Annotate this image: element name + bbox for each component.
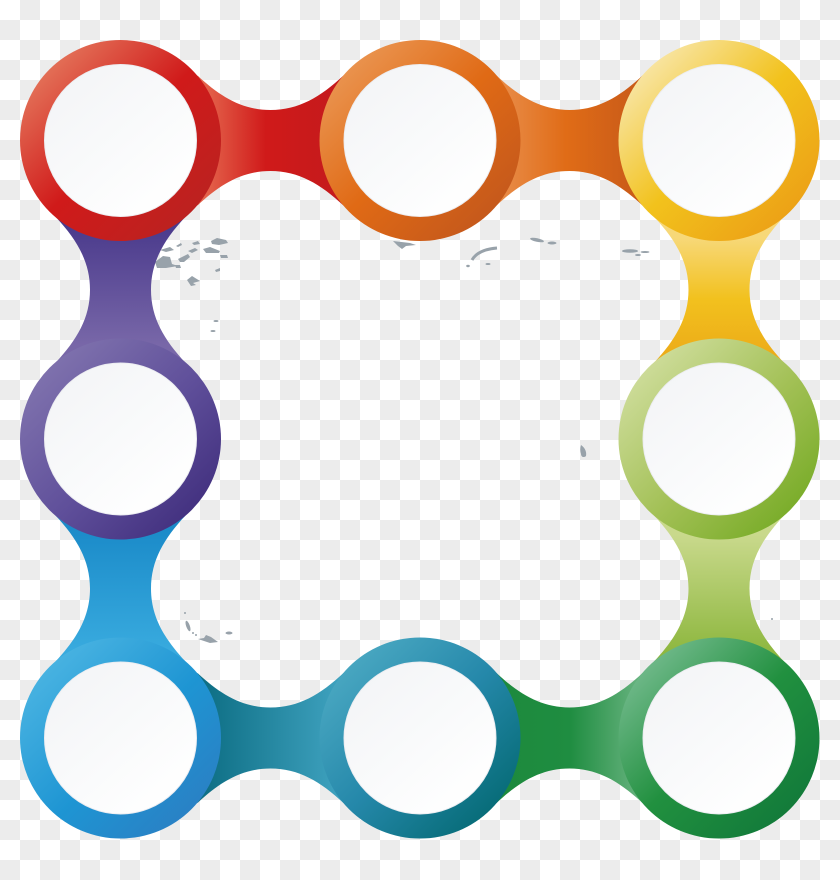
node: yellow circle	[618, 40, 820, 241]
speck: right of centre	[580, 445, 586, 457]
specks: lower left cluster	[184, 612, 232, 643]
node: lime circle	[618, 338, 820, 540]
node: green circle	[618, 638, 820, 838]
connector: orange, top right	[496, 76, 642, 206]
specks: top centre and right cluster	[393, 237, 650, 267]
specks: upper left cluster	[155, 238, 228, 332]
map fragments: grey specks around the ring	[155, 237, 773, 643]
connector: lime, lower right side	[654, 516, 784, 662]
connector: green, bottom right	[496, 673, 642, 803]
node: blue circle	[20, 638, 221, 838]
node: teal circle	[320, 638, 520, 838]
speck: tiny right	[771, 618, 773, 620]
connector: yellow, upper right side	[654, 217, 784, 363]
connector: purple, upper left side	[56, 217, 186, 363]
node: red circle	[20, 40, 221, 241]
node: purple circle	[20, 338, 221, 540]
connector: blue, lower left side	[56, 516, 186, 662]
connector: red, top left	[198, 76, 344, 206]
node: orange circle	[320, 40, 520, 241]
connector: teal, bottom left	[198, 673, 344, 803]
